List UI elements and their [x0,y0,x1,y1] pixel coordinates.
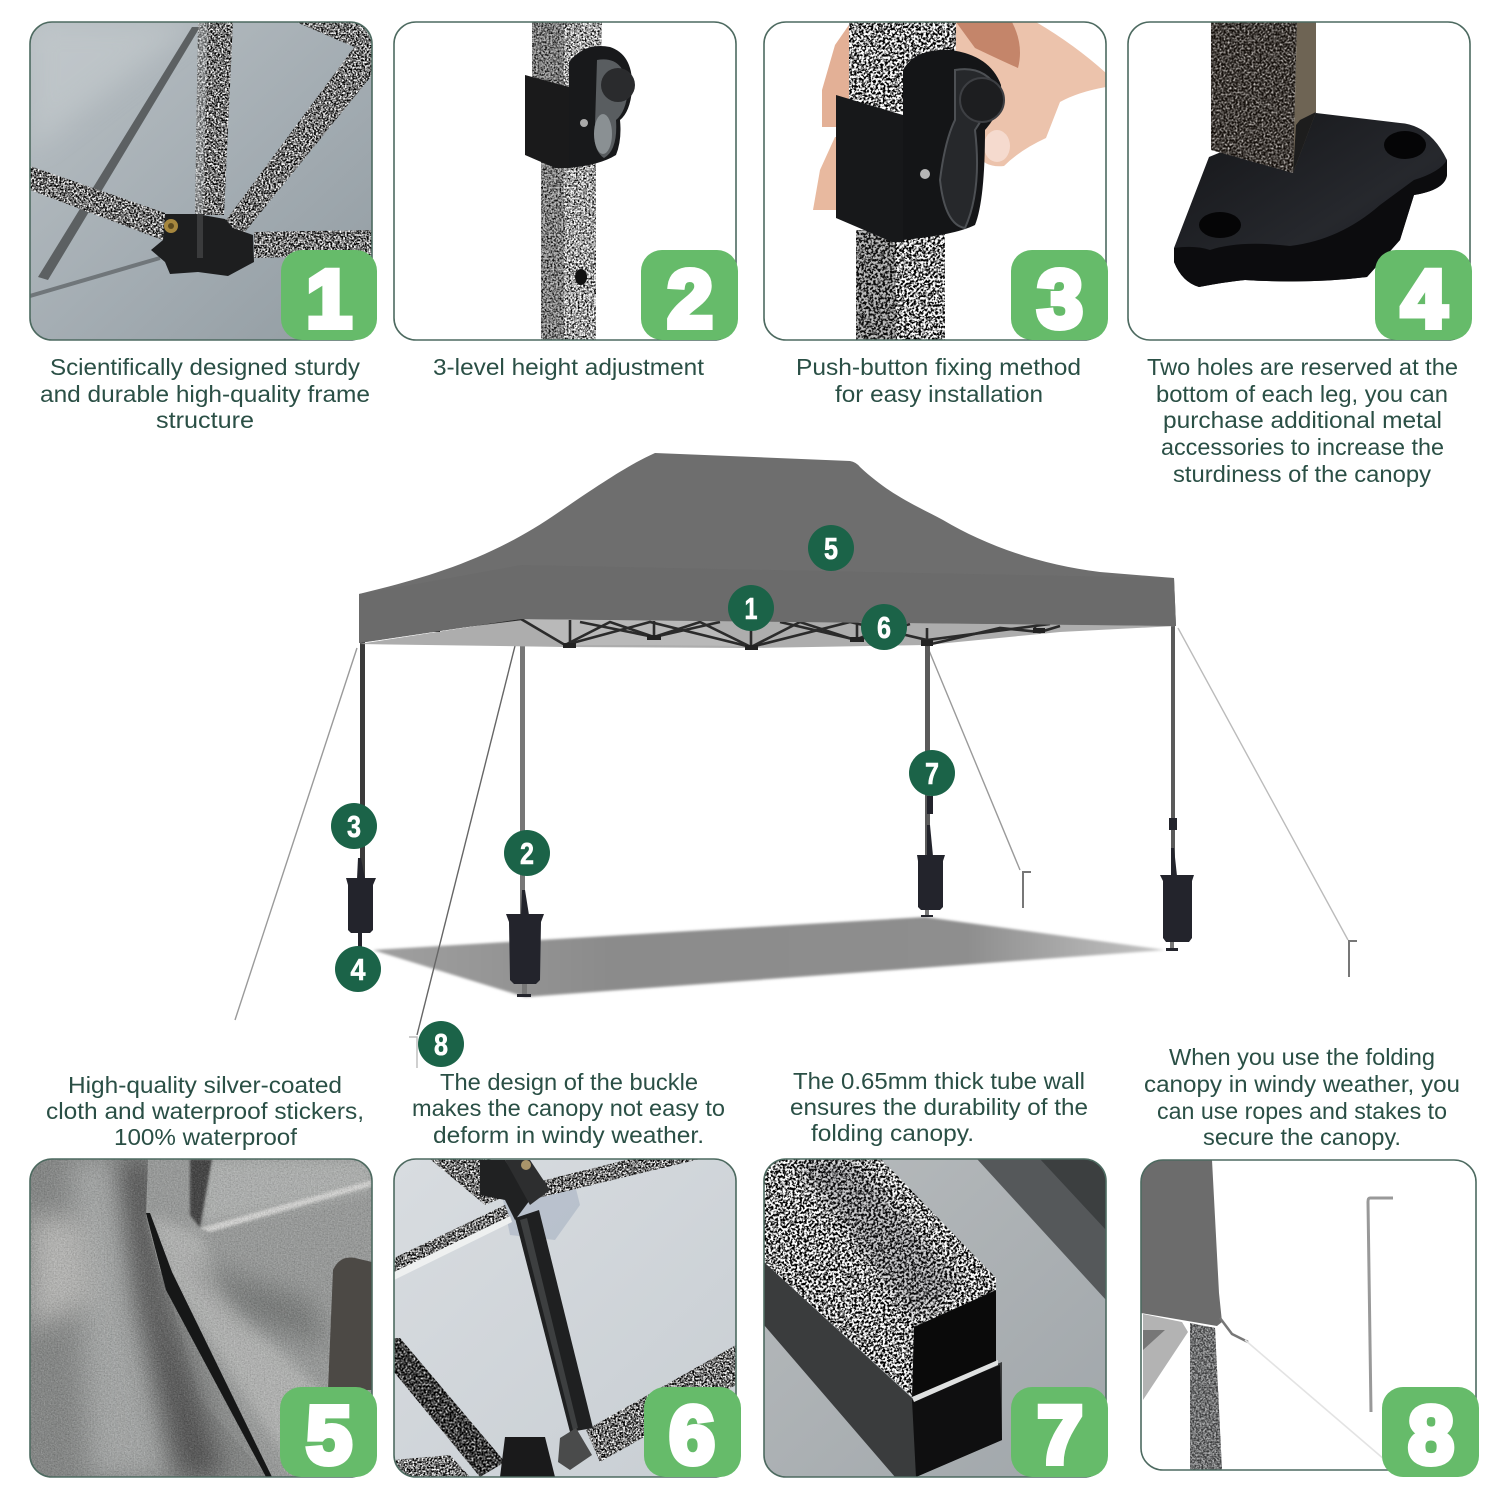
panel 5 outline [30,1159,372,1477]
photo: silver fabric folds [30,1159,372,1477]
caption 4: sturdiness of the canopy [1173,461,1432,487]
panel 2 outline [394,22,736,340]
panel 1: frame structure [30,22,377,345]
badge 3 [1011,250,1108,345]
marker 2: 2 [520,836,534,871]
marker 2 [504,830,550,876]
badge 3: 3 [1037,254,1083,345]
badge 8 [1382,1387,1479,1481]
panel 7: tube wall [764,1159,1108,1481]
badge 2: 2 [667,254,713,345]
caption 4 [1147,354,1458,487]
caption 7: folding canopy. [811,1120,974,1146]
photo: square tube cross-section [764,1159,1106,1477]
panel 8 outline [1141,1160,1476,1470]
caption 8 [1144,1044,1460,1150]
central canopy tent illustration [235,453,1357,1068]
marker 6: 6 [877,610,891,645]
badge 5: 5 [306,1390,352,1481]
badge 1 [281,250,377,345]
panel 2: height adjustment [394,22,738,345]
caption 7 [790,1068,1088,1146]
caption 1: structure [156,407,254,433]
badge 4: 4 [1401,254,1447,345]
caption 4: bottom of each leg, you can [1156,381,1448,407]
photo: leg and base with two holes [1174,22,1447,287]
marker 3: 3 [347,809,361,844]
caption 8: canopy in windy weather, you [1144,1071,1460,1097]
caption 6: The design of the buckle [440,1069,698,1095]
panel 5: silver-coated cloth [30,1159,377,1481]
caption 1: and durable high-quality frame [40,381,370,407]
caption 5: cloth and waterproof stickers, [46,1098,364,1124]
panel 8: ropes and stakes [1141,1160,1479,1481]
panel 3: push-button fixing [764,22,1108,345]
badge 7 [1011,1387,1108,1481]
badge 6 [644,1387,741,1481]
caption 4: accessories to increase the [1161,434,1444,460]
ground shadow [373,917,1165,997]
guy ropes and stakes [235,628,1357,1068]
marker 8 [418,1021,464,1067]
marker 1 [728,585,774,631]
panel 6 outline [394,1159,736,1477]
weight bags [346,796,1194,997]
caption 1: Scientifically designed sturdy [50,354,361,380]
panel 7 outline [764,1159,1106,1477]
marker 7: 7 [925,756,939,791]
photo: buckle strap and frame [394,1159,736,1477]
caption 7: The 0.65mm thick tube wall [793,1068,1085,1094]
marker 5: 5 [824,531,838,566]
badge 6: 6 [669,1390,715,1481]
hand skin [950,22,1106,166]
legs [360,618,1175,916]
marker 3 [331,803,377,849]
marker 6 [861,604,907,650]
caption 1 [40,354,370,433]
badge 5 [280,1387,377,1481]
underside of canopy with frame [359,619,1176,650]
valance shading [359,565,1176,643]
marker 5 [808,525,854,571]
badge 4 [1375,250,1472,345]
marker 4: 4 [350,952,366,987]
marker 7 [909,750,955,796]
caption 6: deform in windy weather. [433,1122,704,1148]
caption 5: 100% waterproof [114,1124,298,1150]
caption 3: Push-button fixing method [796,354,1081,380]
panel 4 outline [1128,22,1470,340]
caption 5: High-quality silver-coated [68,1072,342,1098]
caption 6 [412,1069,725,1148]
marker 4 [335,946,381,992]
caption 5 [46,1072,364,1150]
panel 6: buckle [394,1159,741,1481]
panel 4: foot plate [1128,22,1472,345]
caption 4: purchase additional metal [1163,407,1442,433]
caption 6: makes the canopy not easy to [412,1095,725,1121]
badge 1: 1 [306,254,352,345]
panel 1 outline [30,22,372,340]
caption 2: 3-level height adjustment [433,354,705,380]
caption 8: can use ropes and stakes to [1157,1098,1447,1124]
panel 3 outline [764,22,1106,340]
caption 8: When you use the folding [1169,1044,1435,1070]
number markers on the tent [331,525,955,1067]
caption 3: for easy installation [835,381,1043,407]
photo: canopy corner, pole, rope and stake [1142,1160,1393,1470]
caption 7: ensures the durability of the [790,1094,1088,1120]
photo: frame joint [30,22,373,340]
marker 8: 8 [434,1027,448,1062]
photo: leg with lock button [525,22,635,340]
marker 1: 1 [744,591,758,626]
badge 2 [641,250,738,345]
caption 8: secure the canopy. [1203,1124,1401,1150]
badge 8: 8 [1408,1390,1454,1481]
caption 3 [796,354,1081,407]
canopy roof and valance [359,453,1176,643]
badge 7: 7 [1037,1390,1083,1481]
caption 4: Two holes are reserved at the [1147,354,1458,380]
photo: hand pressing lock [813,22,1106,340]
